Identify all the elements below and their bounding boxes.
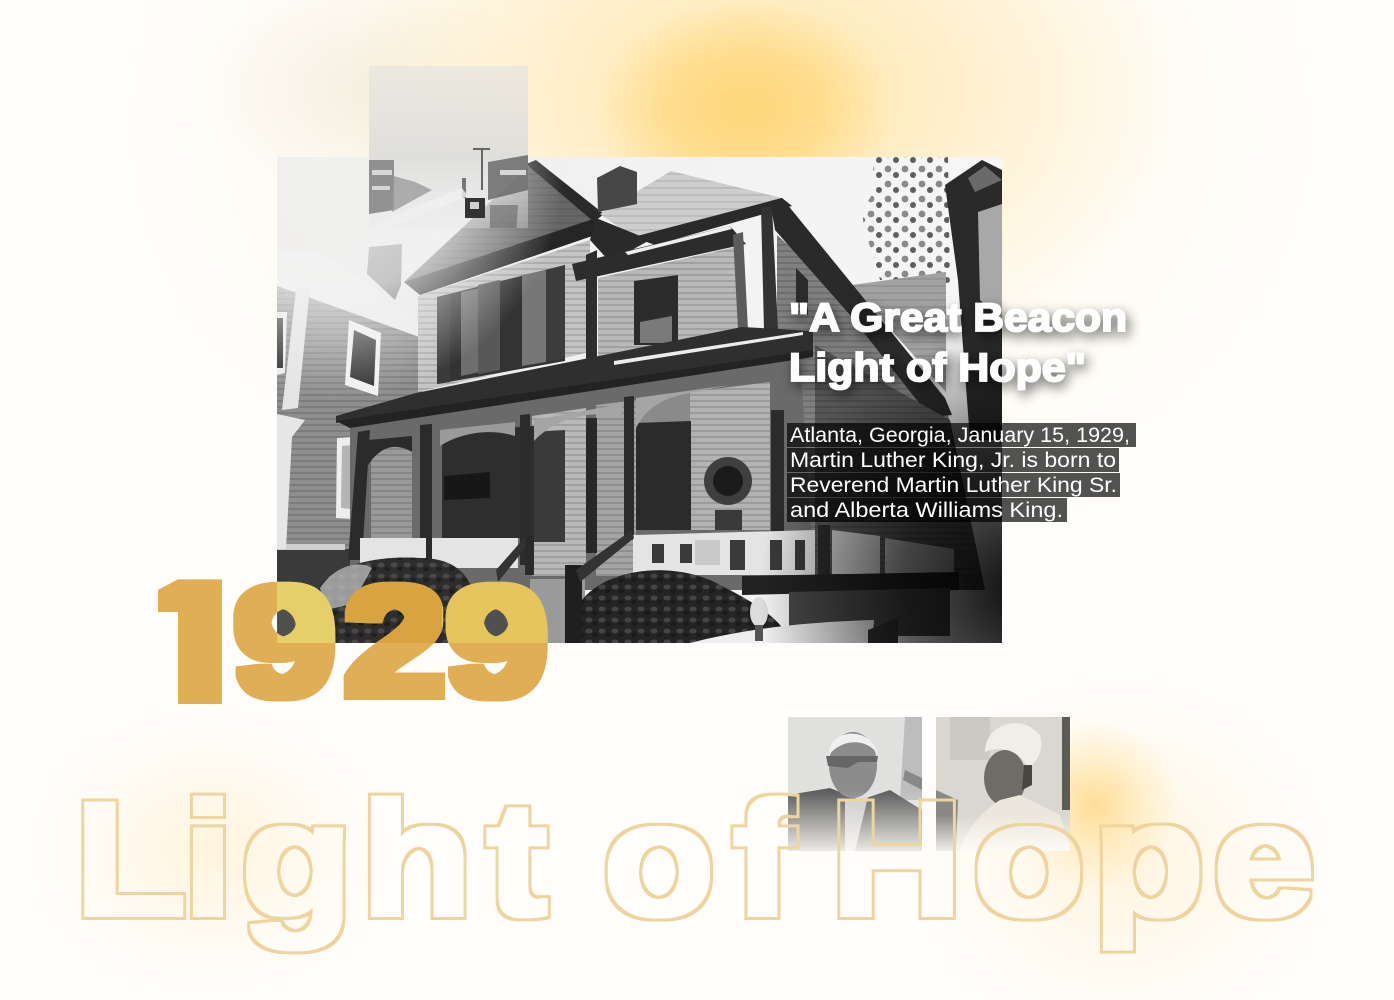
chimneys — [367, 166, 637, 300]
heading: A Great Beacon Light of Hope: Light of Hope" — [789, 346, 1086, 390]
upper storey walls — [404, 198, 952, 530]
upper windows — [437, 265, 808, 384]
photo shading — [768, 346, 1002, 643]
shrubs — [315, 557, 898, 643]
body text with highlight bars: and Alberta Williams King. — [790, 499, 1063, 522]
heading: A Great Beacon Light of Hope — [789, 296, 1127, 390]
porch railings — [360, 525, 954, 576]
main roofs — [404, 160, 946, 392]
large year: 1929: 1 — [144, 556, 247, 728]
lower porch steps and foundation — [277, 530, 959, 643]
heading: A Great Beacon Light of Hope: "A Great Beacon — [789, 296, 1127, 340]
photo: birth home of Martin Luther King Jr. — [277, 157, 1002, 643]
body text with highlight bars: Atlanta, Georgia, January 15, 1929, — [790, 424, 1130, 447]
portrait: Alberta Williams King — [936, 717, 1070, 851]
large year: 1929: 929 — [233, 556, 549, 728]
big outlined title: Light of Hope: LightofHope — [75, 769, 1315, 950]
body text with highlight bars — [787, 423, 1136, 522]
large year: 1929: 929 — [233, 556, 549, 728]
tree behind the house — [863, 157, 950, 285]
portrait: Martin Luther King Sr. — [788, 717, 922, 851]
large year: 1929: 929 — [233, 556, 549, 728]
porch roof — [336, 327, 813, 428]
porch wall, door and round window — [350, 345, 985, 590]
right neighbouring building — [945, 160, 1002, 440]
body text with highlight bars: Reverend Martin Luther King Sr. — [790, 474, 1117, 497]
large year: 1929: 929 — [233, 556, 549, 728]
inset photo: historic street scene — [369, 66, 528, 235]
body text with highlight bars: Martin Luther King, Jr. is born to — [790, 449, 1116, 472]
left neighbouring house — [277, 286, 422, 589]
porch columns and brackets — [348, 385, 730, 565]
large year: 1929 — [158, 579, 548, 704]
